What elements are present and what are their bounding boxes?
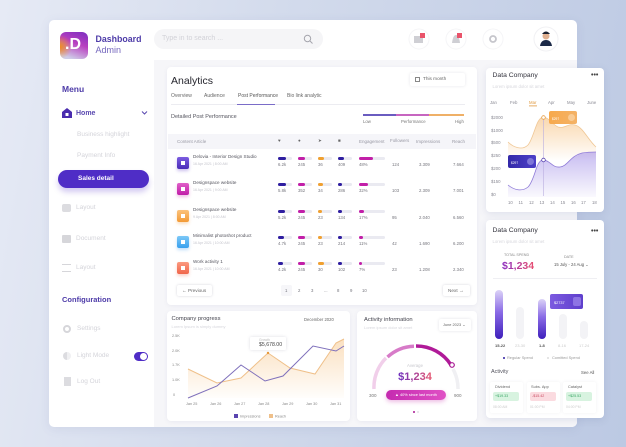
area chart: 10: [508, 200, 513, 205]
row 1: 48%: [359, 162, 368, 167]
performance legend: Low: [363, 119, 371, 124]
row 3: Designspace website: [193, 207, 236, 212]
total spend: TOTAL SPEND: [504, 253, 529, 257]
subs app card: 01:00 PM: [530, 405, 545, 409]
row 1: [175, 154, 464, 172]
row 1: Delovia - Interior Design Studio: [193, 154, 257, 159]
date range: DATE: [564, 255, 574, 259]
table header: Engagement: [359, 139, 385, 144]
bar 5: [580, 321, 588, 339]
table header: ●: [298, 138, 301, 143]
row 2: [175, 180, 464, 199]
area chart: 13: [540, 200, 545, 205]
row 1: 409: [338, 162, 345, 167]
row 3: 134: [338, 215, 345, 220]
line chart: Jan 27: [234, 402, 245, 406]
table header: Content Article: [177, 139, 206, 144]
row 2: 5.8k: [278, 188, 286, 193]
table header: ♥: [278, 138, 281, 143]
layout item 2: Layout: [76, 264, 96, 271]
more menu: •••: [591, 72, 598, 79]
line chart: Impressions: [240, 414, 261, 418]
line chart: 2.5K: [172, 334, 180, 338]
row 3: 9 Apr 2021 | 8:00 AM: [193, 215, 226, 219]
gauge: $1,234: [398, 371, 433, 383]
blue tooltip: [508, 155, 536, 168]
row 3: 245: [298, 215, 305, 220]
row 5: 245: [298, 267, 305, 272]
activity subtitle: Lorem ipsum dolor sit amet: [364, 325, 412, 330]
bar legend: Regular Spend: [507, 354, 533, 360]
dividend card: 08:00 AM: [493, 405, 507, 409]
bar legend: [503, 354, 580, 360]
subheading: Detailed Post Performance: [171, 114, 237, 120]
table header: Followers: [390, 138, 409, 143]
home item: Home: [76, 110, 95, 117]
bar 4: [559, 314, 567, 339]
company progress subtitle: Lorem Ipsum is simply dummy: [172, 324, 226, 329]
previous button: ← Previous: [182, 288, 206, 292]
area chart: $200: [491, 166, 501, 171]
table header: ➤: [318, 138, 322, 143]
activity month selector: June 2023 ⌄: [443, 322, 466, 327]
header icons: [408, 26, 558, 52]
toggle: [134, 352, 148, 361]
pagination: 1: [285, 288, 287, 293]
date range: [554, 255, 589, 267]
subs app card: Subs. App: [531, 384, 549, 389]
pagination: 2: [298, 288, 300, 293]
gauge pill: [386, 390, 446, 400]
row 2: 32%: [359, 188, 368, 193]
row 3: 95: [392, 215, 397, 220]
divider: [493, 277, 597, 280]
area chart: 17: [581, 200, 586, 205]
line chart: Jan 26: [210, 402, 221, 406]
panel: analytics: [167, 67, 477, 305]
pagination: [281, 285, 367, 296]
gauge pill: ▲ 40% since last month: [395, 392, 437, 397]
document icon: [62, 235, 71, 243]
area chart: Apr: [548, 100, 555, 105]
bar labels: 1-8: [539, 343, 545, 348]
line chart: Reach: [275, 414, 286, 418]
tabs: Post Performance: [238, 93, 278, 99]
sidebar menu: [56, 84, 152, 386]
chevron: [142, 111, 148, 115]
home icon: [62, 108, 72, 118]
dividend card: [490, 382, 523, 413]
line chart: 2.0K: [172, 349, 180, 353]
sales detail button: [58, 170, 149, 188]
line chart: 1.0K: [172, 378, 180, 382]
dividend card: Dividend: [495, 384, 510, 389]
area chart: $0: [491, 192, 496, 197]
content background: [154, 60, 577, 427]
area chart: [490, 100, 597, 205]
tabs: Bio link analytic: [287, 93, 321, 99]
dividend card: +$19.33: [495, 394, 508, 398]
analytics title: Analytics: [171, 75, 213, 87]
light mode icon: [63, 352, 71, 360]
subs app card: -$15.42: [532, 394, 544, 398]
tabs: Audience: [204, 93, 225, 99]
panel: data company chart: [486, 68, 604, 212]
bar tooltip: $2737: [554, 301, 565, 305]
table header: Reach: [452, 139, 465, 144]
bar labels: 23-30: [515, 343, 525, 348]
line chart: Jan 28: [258, 402, 269, 406]
bar 3: [538, 299, 546, 339]
area chart: 12: [529, 200, 534, 205]
row 2: 286: [338, 188, 345, 193]
date range: 15 July - 24 Aug ⌄: [554, 262, 589, 267]
settings icon: [63, 325, 71, 333]
next button: [443, 285, 470, 296]
activity heading: Activity: [491, 369, 508, 375]
table header: ■: [338, 138, 341, 143]
pager dots: [413, 411, 419, 413]
chart tooltip: [250, 337, 286, 350]
row 4: 4.7k: [278, 241, 286, 246]
row 2: 34: [318, 188, 323, 193]
bar 1: [495, 290, 503, 339]
row 2: Designspace website: [193, 180, 236, 185]
bar labels: 8-16: [558, 343, 566, 348]
card subtitle: Lorem ipsum dolor sit amet: [492, 84, 544, 89]
settings item: Settings: [77, 325, 100, 332]
pagination: 9: [350, 288, 352, 293]
row 1: 3.309: [419, 162, 430, 167]
row 2: 352: [298, 188, 305, 193]
layout item: Layout: [76, 204, 96, 211]
row 4: 23: [318, 241, 323, 246]
row 5: [176, 259, 464, 278]
catalyst card: [563, 382, 596, 413]
menu heading: Menu: [62, 84, 84, 94]
brand name: [96, 34, 141, 55]
area chart: 11: [518, 200, 524, 205]
area chart: $250: [491, 153, 501, 158]
row 1: 7.664: [453, 162, 464, 167]
area chart: 14: [550, 200, 555, 205]
row 4: 11%: [359, 241, 367, 246]
area chart: Mar: [529, 100, 537, 105]
catalyst card: Catalyst: [568, 384, 582, 389]
spend card menu: •••: [591, 228, 598, 235]
gauge: 300: [369, 393, 377, 398]
bar labels: 15-22: [495, 343, 505, 348]
row 1: 16 Apr 2021 | 8:00 AM: [193, 162, 228, 166]
spend card title: Data Company: [492, 227, 538, 234]
spend card subtitle: Lorem ipsum dolor sit amet: [492, 239, 544, 244]
total spend: $1,234: [502, 260, 534, 272]
area chart: 16: [571, 200, 576, 205]
see all link: See All: [581, 370, 594, 375]
bar labels: 17-24: [579, 343, 589, 348]
row 3: 17%: [359, 215, 368, 220]
area chart: 15: [560, 200, 566, 205]
row 4: 245: [298, 241, 305, 246]
tabs: Overview: [171, 93, 192, 99]
orange tooltip: [549, 111, 577, 124]
row 1: 245: [298, 162, 305, 167]
line chart: Jan 25: [186, 402, 197, 406]
row 1: 6.2k: [278, 162, 286, 167]
area chart: Feb: [510, 100, 518, 105]
area chart: June: [587, 100, 597, 105]
area chart: $2000: [491, 115, 504, 120]
subs app card: [527, 382, 560, 413]
bar legend: Comitted Spend: [552, 354, 580, 360]
bar chart: [495, 290, 589, 348]
activity month selector: [439, 319, 471, 331]
panel: activity information: [357, 311, 477, 421]
row 1: 124: [392, 162, 399, 167]
total spend: [502, 253, 534, 272]
pagination: 10: [362, 288, 367, 293]
brand name: Admin: [96, 45, 121, 55]
bar 2: [516, 307, 524, 339]
table header: Impressions: [416, 139, 440, 144]
line chart: [172, 334, 344, 418]
log out icon: [64, 377, 71, 386]
row 5: Work activity 1: [193, 259, 223, 264]
row 5: 1.208: [419, 267, 430, 272]
orange tooltip: $297: [552, 117, 559, 121]
row 3: 6.560: [453, 215, 464, 220]
row 4: 6.200: [453, 241, 464, 246]
row 3: 23: [318, 215, 323, 220]
date picker: [410, 73, 465, 86]
panel: company progress: [167, 311, 350, 421]
line chart: Jan 30: [306, 402, 317, 406]
company progress heading: Company progress: [172, 316, 220, 322]
payment info: Payment Info: [77, 152, 115, 159]
performance legend: [363, 114, 464, 124]
area chart: May: [567, 100, 576, 105]
log out item: Log Out: [77, 378, 100, 385]
blue tooltip: $297: [511, 161, 518, 165]
row 5: 2.340: [453, 267, 464, 272]
chart tooltip: Growth: [259, 338, 270, 342]
area chart: $500: [491, 140, 501, 145]
row 5: 4.2k: [278, 267, 286, 272]
document item: Document: [76, 235, 106, 242]
search bar: [154, 29, 323, 49]
area chart: $1000: [491, 128, 504, 133]
pagination: 8: [337, 288, 339, 293]
date picker: This month: [423, 76, 446, 81]
main dashboard panel: [49, 20, 577, 427]
line chart: 0: [173, 393, 175, 397]
row 4: [175, 233, 464, 252]
next button: Next →: [448, 288, 464, 292]
catalyst card: 04:00 PM: [566, 405, 581, 409]
row 5: 23: [392, 267, 397, 272]
row 1: 36: [318, 162, 323, 167]
tabs: [171, 94, 465, 105]
configuration heading: Configuration: [62, 295, 111, 304]
line chart: Jan 29: [282, 402, 293, 406]
performance legend: High: [455, 119, 464, 124]
row 4: 1.690: [419, 241, 430, 246]
row 3: 5.2k: [278, 215, 286, 220]
logo: [60, 32, 88, 59]
row 5: 16 Apr 2021 | 10:00 AM: [193, 267, 230, 271]
bar labels: [495, 343, 589, 348]
layout icon: [62, 204, 71, 212]
business highlight: Business highlight: [77, 131, 129, 138]
pagination: ...: [324, 288, 328, 293]
row 2: 103: [392, 188, 399, 193]
area chart: $150: [491, 179, 501, 184]
area chart: Jan: [490, 100, 498, 105]
gauge: 900: [454, 393, 462, 398]
search bar: Type in to search ...: [162, 35, 223, 42]
gauge: [369, 344, 462, 398]
layout icon 2: [62, 264, 71, 272]
bar tooltip: [550, 294, 583, 309]
sales detail button: Sales detail: [78, 175, 114, 182]
performance legend: Performance: [401, 119, 426, 124]
previous button: [177, 285, 212, 296]
row 4: Minimalist photoshot product: [193, 233, 251, 238]
row 4: 42: [392, 241, 397, 246]
row 4: 214: [338, 241, 345, 246]
area chart: 18: [592, 200, 597, 205]
month selector: December 2020: [304, 317, 334, 322]
row 5: 7%: [359, 267, 365, 272]
gauge: Average: [407, 363, 424, 368]
line chart: 1.7K: [172, 363, 180, 367]
chart tooltip: $5,678.00: [259, 342, 282, 348]
row 2: 7.001: [453, 188, 464, 193]
card title: Data Company: [492, 72, 538, 79]
row 4: 16 Apr 2021 | 10:00 AM: [193, 241, 230, 245]
activity heading: Activity information: [364, 317, 413, 323]
catalyst card: +$25.53: [568, 394, 581, 398]
panel: data company spend: [486, 220, 604, 418]
table header: [168, 134, 476, 149]
light mode item: Light Mode: [77, 352, 109, 359]
row 5: 30: [318, 267, 323, 272]
row 3: [175, 207, 464, 226]
row 3: 2.040: [419, 215, 430, 220]
row 2: 16 Apr 2021 | 9:00 AM: [193, 188, 228, 192]
line chart: Jan 31: [330, 402, 341, 406]
logo: .D: [65, 36, 81, 53]
row 5: 102: [338, 267, 345, 272]
pagination: 3: [311, 288, 313, 293]
brand name: Dashboard: [96, 34, 141, 44]
row 2: 2.309: [419, 188, 430, 193]
